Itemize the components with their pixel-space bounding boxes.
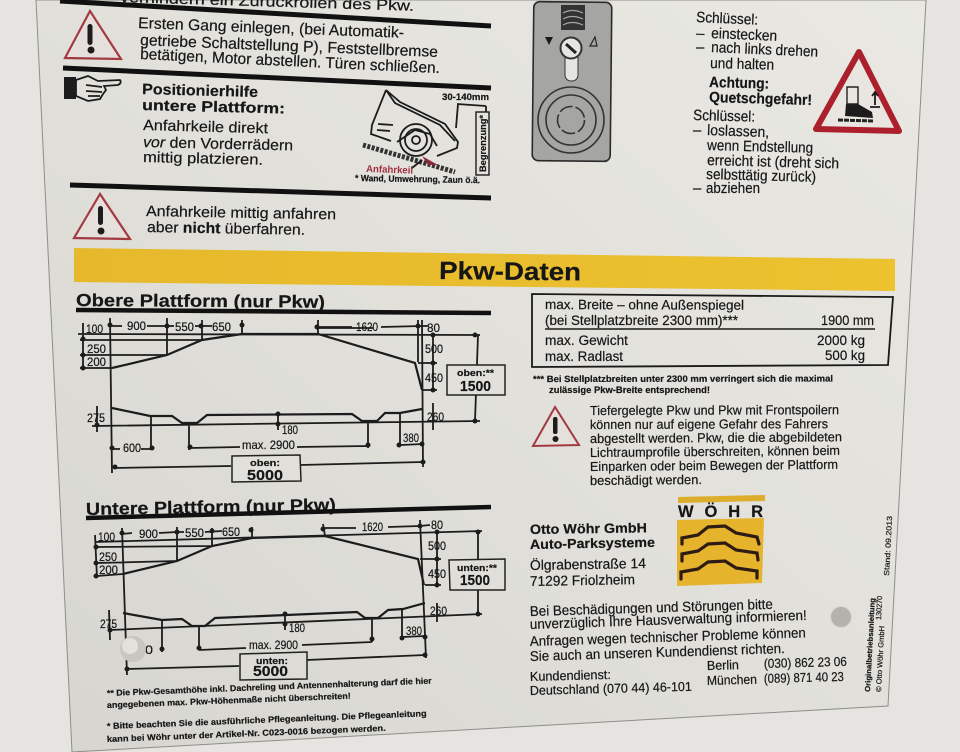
dimension labels: 275 [100,617,117,631]
dimension labels: 900 [139,527,158,541]
text: vertical print info [863,516,894,692]
dimension labels: 500 [428,539,446,553]
panel: upper platform diagram [76,290,505,484]
dimension labels: 450 [425,371,443,385]
text: service notice: unverzüglich Ihre Hausverwaltung informieren! [530,607,807,632]
dimension labels [98,518,447,657]
length box: 5000: 5000 [247,467,283,484]
illustration: car on ramp: Begrenzung* [478,115,489,172]
footnotes: ** Die Pkw-Gesamthöhe inkl. Dachreling und Antennenhalterung darf die hier [107,676,433,698]
text: key instructions: – [693,180,702,197]
text: address [530,554,646,589]
panel: yellow title band [74,248,895,291]
table rows: max. Breite – ohne Außenspiegel [545,297,744,313]
dimension end dots [94,524,480,672]
text: positioning help: Positionierhilfe [142,81,258,101]
mounting hole [830,606,852,628]
dimension labels: 80 [431,518,443,532]
text: customer service contacts [530,654,847,698]
text: customer service contacts: (030) 862 23 06 [764,654,847,671]
table rows [545,297,874,364]
footnotes: angegebenen max. Pkw-Höhenmaße nicht überschreiten! [107,691,351,710]
text: vertical print info: Originalbetriebsanleitung [863,597,877,692]
dimension labels: 200 [99,563,118,577]
text: service notice: Bei Beschädigungen und Störungen bitte [530,596,773,619]
text: key instructions: Schlüssel: [693,107,755,126]
dimension labels: 380 [403,431,419,445]
heading: Pkw-Daten: Pkw-Daten [439,257,581,286]
dimension labels: 550 [175,320,194,334]
text: customer service contacts: (089) 871 40 23 [764,669,844,686]
dimension labels: 180 [289,621,305,635]
dimension labels: 600 [123,441,141,455]
table rows: (bei Stellplatzbreite 2300 mm)*** [545,313,739,328]
text: key instructions: nach links drehen [711,39,818,61]
length box: 5000: unten: [256,656,288,667]
text: key instructions [693,9,839,197]
table frame [532,294,893,367]
text: key instructions: einstecken [711,25,778,45]
dimension labels: 0 [145,643,153,657]
illustration: car on ramp: * Wand, Umwehrung, Zaun ö.ä. [355,173,480,185]
dimension labels: 1620 [356,320,378,334]
text: address: Ölgrabenstraße 14 [530,554,646,573]
dimension labels: 550 [185,526,204,540]
panel: key switch [532,2,612,161]
text: customer service contacts: Berlin [707,657,739,673]
length box: 5000 [240,652,307,680]
text: key instructions: selbsttätig zurück) [706,166,816,186]
logo: Wöhr [677,495,765,586]
text: lowered cars warning: Einparken oder beim Bewegen der Plattform [590,457,838,474]
logo: Wöhr: WÖHR [678,502,763,521]
height box: 1500: 1500 [460,572,490,589]
height box: 1500 [447,365,505,395]
text: width footnote: *** Bei Stellplatzbreiten unter 2300 mm verringert sich die maximal [533,373,833,384]
text: positioning help: vor den Vorderrädern [143,134,293,154]
icon: warning triangle 3 [533,407,579,446]
footnotes: * Bitte beachten Sie die ausführliche Pflegeanleitung. Die Pflegeanleitung [107,708,427,731]
text: company name [530,520,656,552]
panel: parking instructions [64,0,489,239]
text: service notice: Anfragen wegen technischer Probleme können [530,624,806,649]
dimension labels: 100 [98,530,115,544]
text: first gear instruction: betätigen, Motor abstellen. Türen schließen. [140,46,440,77]
height box: 1500: oben:** [457,368,494,379]
text: key instructions: – [696,25,706,42]
text: lowered cars warning: Lichtraumprofile überschreiten, können beim [590,443,840,460]
illustration: car on ramp [355,90,489,185]
text: first gear instruction: Ersten Gang einlegen, (bei Automatik- [138,15,404,42]
panel: lower platform diagram [86,495,505,744]
text: lowered cars warning: abgestellt werden. Pkw, die die abgebildeten [590,429,842,446]
height box: 1500 [449,559,505,590]
dimension labels: 380 [406,624,422,638]
dimension labels: max. 2900 [242,438,295,452]
height box: 1500: unten:** [457,563,497,574]
text: vertical print info: Stand: 09.2013 [882,516,894,576]
icon: round button [538,87,604,153]
dimension labels: 260 [427,410,444,424]
icon: key cylinder [560,38,582,81]
dimension labels: 450 [428,567,446,581]
dimension labels: 80 [427,321,440,335]
heading rule [86,507,491,518]
table rule [545,328,875,330]
text: vertical print info: 130270 [874,596,884,620]
text: lowered cars warning: können nur auf eigene Gefahr des Fahrers [590,416,828,432]
text: lowered cars warning [590,402,842,488]
text: key instructions: Achtung: [709,74,769,93]
car profile outline [112,334,422,423]
car profile outline [123,536,425,626]
length box: 5000 [232,455,301,484]
table rows: 500 kg [825,348,865,363]
icon: warning triangle 1 [65,11,121,59]
text: width footnote: zulässige Pkw-Breite entsprechend! [549,385,710,395]
panel: manufacturer block [530,495,894,698]
height box: 1500: 1500 [460,378,491,395]
dimension labels: 500 [425,342,443,356]
dimension labels: 275 [87,411,105,425]
dimension labels: 1620 [362,520,383,534]
table rows: 1900 mm [821,313,874,328]
dimension labels: 200 [87,355,106,369]
table rows: 2000 kg [817,333,865,348]
footnotes: kann bei Wöhr unter der Artikel-Nr. C023-0016 bezogen werden. [107,723,386,744]
text: customer service contacts: Kundendienst: [530,667,611,684]
text: company name: Otto Wöhr GmbH [530,520,647,537]
text: address: 71292 Friolzheim [530,571,635,589]
illustration: car on ramp: Anfahrkeil [366,164,413,177]
text: service notice: Sie auch an unseren Kundendienst richten. [530,640,785,664]
text: customer service contacts: Deutschland (070 44) 46-101 [530,679,692,698]
band [74,248,895,291]
heading: lower platform: Untere Plattform (nur Pkw) [86,495,336,519]
text: company name: Auto-Parksysteme [530,535,656,552]
icon: crush hazard triangle [816,52,899,131]
text: vertical print info: © Otto Wöhr GmbH [874,626,886,692]
text: key instructions: wenn Endstellung [706,137,813,157]
dimension labels: 100 [86,322,103,336]
dimension end dots [80,322,478,470]
table rows: max. Gewicht [545,333,628,348]
heading rule [76,310,491,313]
length box: 5000: oben: [250,458,280,469]
text: customer service contacts: München [707,672,757,688]
text: key instructions: loslassen, [707,122,769,141]
text: lowered cars warning: Tiefergelegte Pkw und Pkw mit Frontspoilern [590,402,839,418]
text: positioning help: Anfahrkeile direkt [143,117,269,137]
heading: upper platform: Obere Plattform (nur Pkw) [76,290,325,312]
text: ramp warning [146,203,336,239]
dimension labels: 180 [282,423,298,437]
dimension labels: 650 [212,320,231,334]
icon: down and up arrows [545,37,597,46]
text: service notice [530,596,807,664]
text: positioning help: untere Plattform: [142,97,285,117]
text: key instructions: – [696,39,705,56]
text: key instructions: Schlüssel: [696,9,759,29]
mounting screw hole [120,636,146,662]
text: first gear instruction [138,15,440,77]
dimension lines [78,318,480,473]
dimension lines [95,520,482,675]
text: width footnote [533,373,833,395]
text: ramp warning: Anfahrkeile mittig anfahren [146,203,336,223]
text: lowered cars warning: beschädigt werden. [590,472,702,488]
text: positioning help: mittig platzieren. [143,149,263,169]
dimension labels: 260 [430,604,447,618]
icon: warning triangle 2 [74,194,130,239]
panel: vehicle data table [532,294,893,367]
table rows: max. Radlast [545,349,623,364]
text: key instructions: – [693,122,702,139]
length box: 5000: 5000 [253,664,288,680]
text: key instructions: erreicht ist (dreht sich [707,152,839,172]
text: key instructions: Quetschgefahr! [709,89,812,109]
text: ramp warning: aber nicht überfahren. [147,219,305,239]
dimension labels: 250 [99,550,117,564]
illustration: car on ramp: 30-140mm [442,92,489,103]
icon: pointing hand [64,76,121,101]
text: first gear instruction: getriebe Schaltstellung P), Feststellbremse [140,32,438,61]
icon: platform symbol [561,5,585,30]
dimension labels: 250 [87,342,106,356]
dimension labels [86,319,444,455]
text: positioning help [142,81,293,169]
dimension labels: 650 [222,525,240,539]
text: key instructions: abziehen [706,180,760,197]
footnotes [107,676,433,744]
dimension labels: max. 2900 [249,638,298,652]
text: key instructions: und halten [710,55,774,74]
key switch plate [532,2,612,161]
dimension labels: 900 [127,319,146,333]
